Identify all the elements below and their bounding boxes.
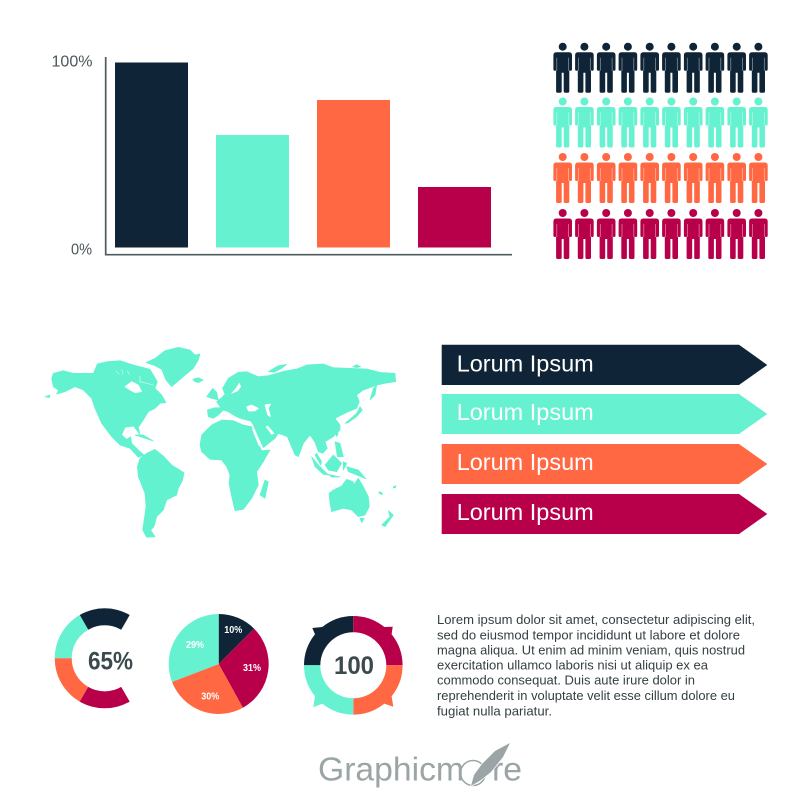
Sulawesi — [343, 462, 347, 470]
Eurasia — [207, 364, 396, 457]
banner: navy — [442, 345, 767, 385]
Novaya Zemlya — [268, 364, 287, 372]
Britain — [207, 388, 218, 400]
radial gauge: 100: 100 — [334, 652, 374, 680]
Pacific islands — [379, 486, 396, 495]
people row: navy — [553, 43, 768, 93]
chart axes — [106, 57, 512, 255]
pie chart — [169, 614, 269, 714]
New Siberian Islands — [353, 365, 361, 368]
bar: orange — [317, 100, 390, 248]
world map — [45, 347, 396, 537]
banner: crimson — [442, 494, 767, 534]
logo: Graphicmore: Graphicm — [318, 751, 464, 788]
Australia — [329, 478, 369, 517]
Taiwan — [336, 433, 338, 437]
people row: teal — [553, 98, 768, 148]
logo: Graphicmore: re — [492, 751, 522, 788]
people row: crimson — [553, 209, 768, 259]
Hudson Bay and channels — [116, 369, 153, 393]
y axis label: 100%: 100% — [52, 54, 92, 70]
banner: teal — [442, 394, 767, 434]
Greenland and Iceland — [146, 347, 203, 387]
paragraph: commodo consequat. Duis aute irure dolor in — [437, 674, 695, 688]
Japan — [345, 407, 362, 423]
South America — [137, 449, 184, 537]
New Zealand — [382, 511, 393, 527]
banner: navy: Lorum Ipsum — [457, 351, 594, 377]
donut chart: 65% — [55, 608, 133, 708]
y axis label: 0%: 0% — [71, 242, 92, 258]
Africa and Madagascar — [200, 420, 270, 511]
Malay Peninsula — [315, 453, 322, 465]
pie chart: 31% — [243, 662, 262, 674]
bar: crimson — [418, 187, 491, 248]
banner: teal: Lorum Ipsum — [457, 399, 594, 425]
Caspian Sea — [265, 404, 271, 417]
North America — [52, 361, 166, 457]
people row: orange — [553, 153, 768, 203]
Eurasia and Southeast Asia — [207, 364, 396, 479]
Alaska islands — [45, 395, 50, 398]
Sakhalin — [370, 385, 377, 400]
Philippines — [335, 442, 343, 457]
Americas west: North America group — [45, 361, 166, 457]
Sumatra — [312, 457, 328, 475]
Caribbean islands — [135, 435, 153, 441]
pie chart: 30% — [201, 691, 220, 703]
banner: crimson: Lorum Ipsum — [457, 499, 594, 525]
Persian Gulf — [266, 426, 274, 434]
Red Sea — [252, 429, 260, 446]
radial gauge: 100 — [304, 616, 403, 715]
paragraph: exercitation ullamco laboris nisi ut aliquip ex ea — [437, 658, 708, 672]
Australia and Oceania — [329, 478, 396, 527]
paragraph — [437, 613, 755, 718]
banner: orange: Lorum Ipsum — [457, 449, 594, 475]
paragraph: fugiat nulla pariatur. — [437, 704, 552, 718]
bar chart — [52, 54, 512, 258]
bar: teal — [216, 135, 289, 248]
paragraph: Lorem ipsum dolor sit amet, consectetur adipiscing elit, — [437, 613, 755, 627]
bar: navy — [115, 62, 188, 248]
Tasmania — [360, 518, 364, 523]
pictogram: people rows — [553, 43, 768, 259]
paragraph: sed do eiusmod tempor incididunt ut labore et dolore — [437, 628, 740, 642]
Java — [328, 474, 340, 477]
Black Sea — [247, 405, 258, 411]
Baltic Sea — [232, 383, 241, 393]
pie chart: 10% — [224, 624, 243, 636]
Inland seas — [232, 383, 274, 446]
logo: Graphicmore — [318, 743, 522, 788]
New Guinea — [347, 467, 366, 479]
pie chart: 29% — [186, 639, 205, 651]
Borneo — [325, 455, 342, 472]
paragraph: magna aliqua. Ut enim ad minim veniam, quis nostrud — [437, 643, 745, 657]
icon: pen nib in circle — [460, 743, 510, 786]
paragraph: reprehenderit in voluptate velit esse cillum dolore eu — [437, 689, 735, 703]
banner: orange — [442, 444, 767, 484]
donut chart: 65%: 65% — [88, 647, 133, 675]
arrow banners — [442, 345, 767, 534]
